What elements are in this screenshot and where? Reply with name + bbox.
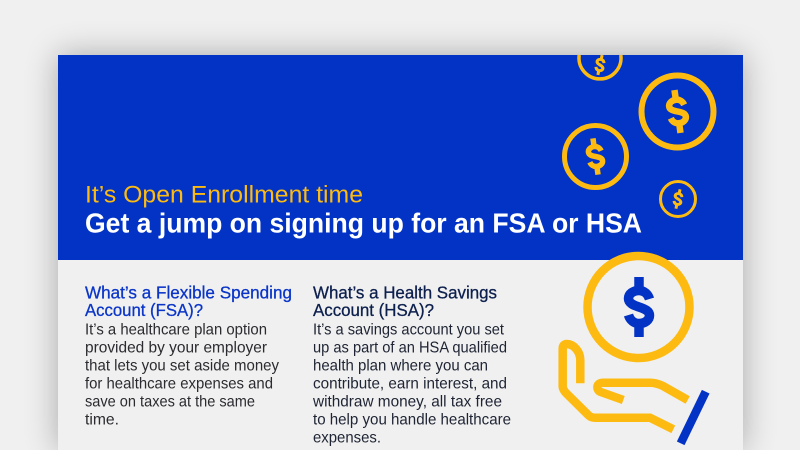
text block: FSA body: time. (85, 411, 119, 428)
panel: FSA explanation (85, 282, 292, 428)
text block: HSA body (312, 321, 511, 446)
heading: HSA: Account (HSA)? (313, 300, 434, 320)
icon: small coin (660, 182, 696, 216)
icon: top clipped coin (579, 54, 621, 79)
icon: main coin (588, 256, 690, 358)
panel: HSA explanation (312, 282, 511, 446)
text block: HSA body: withdraw money, all tax free (312, 393, 502, 410)
icon: medium coin (564, 126, 626, 188)
heading: HSA (313, 282, 497, 320)
text block: FSA body: save on taxes at the same (85, 393, 255, 410)
banner kicker: It’s Open Enrollment time (85, 181, 363, 208)
heading: HSA: What’s a Health Savings (313, 282, 497, 302)
text block: HSA body: contribute, earn interest, and (313, 375, 507, 392)
text block: FSA body: provided by your employer (85, 339, 268, 356)
text block: FSA body: It’s a healthcare plan option (85, 321, 267, 338)
text block: FSA body (85, 321, 279, 428)
text block: HSA body: up as part of an HSA qualified (313, 339, 507, 356)
text block: HSA body: It’s a savings account you set (313, 321, 505, 338)
icon: cuff (681, 392, 706, 443)
text block: FSA body: for healthcare expenses and (85, 375, 273, 392)
header banner (58, 55, 743, 260)
icon: main dollar sign (628, 277, 650, 337)
heading: FSA (85, 282, 292, 320)
banner title: Get a jump on signing up for an FSA or HSA (85, 208, 642, 239)
page sheet (58, 55, 743, 450)
text block: HSA body: expenses. (313, 429, 381, 446)
text block: HSA body: health plan where you can (313, 357, 488, 374)
text block: FSA body: that lets you set aside money (85, 357, 279, 374)
icon: hand holding coin (563, 256, 706, 443)
heading: FSA: Account (FSA)? (85, 300, 203, 320)
icon: large coin (642, 76, 714, 148)
text block: HSA body: to help you handle healthcare (313, 411, 511, 428)
header coins (564, 54, 714, 216)
heading: FSA: What’s a Flexible Spending (85, 282, 292, 302)
icon: hand (563, 344, 688, 429)
